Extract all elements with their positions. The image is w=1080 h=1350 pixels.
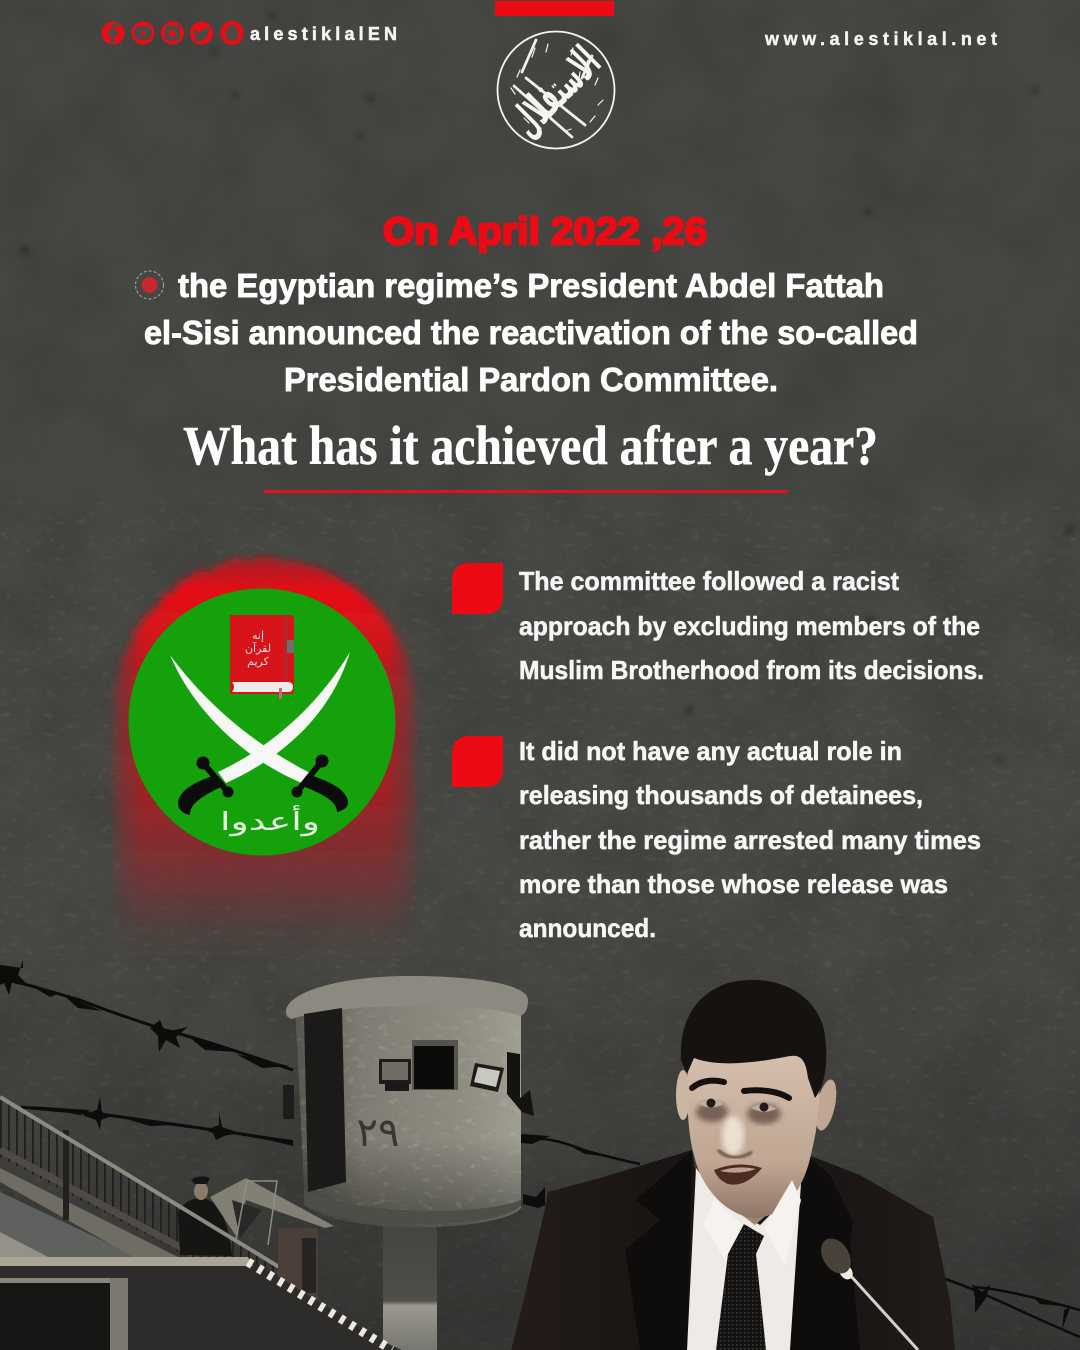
nose xyxy=(718,1116,752,1158)
newspaper clipping text: وكانت أبوظبي تعمل xyxy=(43,623,105,633)
text block: more than those whose release was xyxy=(519,869,948,899)
newspaper clipping text: الصداقة بينها وبين xyxy=(43,615,98,624)
tower roof xyxy=(286,976,528,1019)
date heading: On April 2022 ,26 xyxy=(383,211,707,253)
guard figure xyxy=(178,1176,232,1256)
barbed wire: right of tower xyxy=(521,1134,640,1208)
icon: red book xyxy=(230,615,294,699)
speaker portrait xyxy=(511,980,955,1350)
icon: crossed swords xyxy=(170,652,350,815)
logo: calligraphic roundel xyxy=(498,32,614,148)
icon: snapchat xyxy=(220,21,244,45)
handle text: alestiklalEN xyxy=(250,24,397,44)
tower door xyxy=(304,1008,346,1192)
text block xyxy=(519,736,981,943)
icon: red book: لقرآن xyxy=(245,641,271,655)
text block: approach by excluding members of the xyxy=(519,611,980,641)
text block: releasing thousands of detainees, xyxy=(519,780,923,810)
eye shadows xyxy=(696,1102,781,1124)
text block: announced. xyxy=(519,913,656,943)
bullet point 1 xyxy=(452,563,984,685)
emblem motto: وأعدوا xyxy=(220,804,320,837)
website url: www.alestiklal.net xyxy=(764,29,997,49)
tower window xyxy=(412,1040,458,1090)
newspaper clipping text: صاحب السمو حاكم xyxy=(43,570,103,579)
newspaper clipping text: وهذه الجمهورية من xyxy=(43,552,104,561)
text block xyxy=(519,566,984,685)
newspaper clipping text: فكانت أبوظبي هي xyxy=(43,596,100,606)
shirt xyxy=(687,1157,805,1350)
icon: instagram xyxy=(161,22,184,44)
tie xyxy=(716,1224,766,1350)
newspaper clipping text xyxy=(43,552,111,651)
intro text: the Egyptian regime’s President Abdel Fattah xyxy=(178,267,884,304)
tower column xyxy=(383,1220,437,1350)
red underline xyxy=(264,490,788,493)
newspaper clipping text: الحرص على الاشتراك xyxy=(43,633,111,642)
watch tower xyxy=(283,976,534,1350)
tower side bracket xyxy=(507,1052,534,1116)
text block: The committee followed a racist xyxy=(519,566,899,596)
face xyxy=(687,1037,820,1218)
barbed wire: lower right xyxy=(942,1278,1080,1337)
icon: target bullet xyxy=(136,271,164,299)
newspaper clipping text: خارج حدود هذه الدولة xyxy=(43,561,111,570)
red arch glow xyxy=(113,558,416,960)
neck xyxy=(696,1120,808,1225)
foreground railing xyxy=(0,1097,307,1284)
left side lamp xyxy=(283,1085,294,1119)
building roof foreground xyxy=(0,1257,402,1350)
painted tower number: ٢٩ xyxy=(357,1110,399,1156)
floodlight left xyxy=(379,1059,411,1091)
ears xyxy=(676,1070,840,1132)
hair xyxy=(681,980,826,1098)
eyebrows xyxy=(692,1081,789,1098)
eyes xyxy=(699,1098,776,1112)
emblem: Muslim Brotherhood xyxy=(128,588,396,856)
mouth xyxy=(714,1164,762,1185)
intro text: Presidential Pardon Committee. xyxy=(284,361,778,398)
icon: red book: كريم xyxy=(247,655,270,668)
lapels xyxy=(625,1150,860,1350)
floodlight right xyxy=(470,1063,504,1092)
stairs and railing xyxy=(0,1098,307,1292)
newspaper clipping text: الذي رأى بأنها هي xyxy=(43,578,98,588)
icon: twitter xyxy=(190,22,213,44)
emblem disc xyxy=(128,588,396,856)
red top bar xyxy=(495,1,614,16)
newspaper clipping text: يجب عليه أن يعمل xyxy=(43,587,101,597)
text block: Muslim Brotherhood from its decisions. xyxy=(519,655,984,685)
newspaper clipping text: والاتصالات العربية xyxy=(43,642,98,651)
text block: rather the regime arrested many times xyxy=(519,825,981,855)
text block: It did not have any actual role in xyxy=(519,736,902,766)
icon: red leaf marker xyxy=(452,736,503,787)
icon: facebook xyxy=(102,22,124,44)
intro text xyxy=(144,267,918,398)
microphone xyxy=(815,1233,918,1350)
social media handle xyxy=(102,21,397,45)
guard hut xyxy=(210,1178,334,1300)
bullet point 2 xyxy=(452,736,981,943)
intro text: el-Sisi announced the reactivation of the so-called xyxy=(144,314,918,351)
subtitle question: What has it achieved after a year? xyxy=(183,415,878,476)
icon: youtube xyxy=(132,22,154,44)
suit jacket xyxy=(511,1150,955,1350)
barbed wire: left xyxy=(0,960,293,1146)
icon: red leaf marker xyxy=(452,563,503,614)
tower body xyxy=(295,1000,525,1240)
newspaper clipping text: الحرص على تقوية xyxy=(43,606,99,615)
icon: red book: إنه xyxy=(252,629,264,642)
shirt collar xyxy=(704,1180,801,1266)
